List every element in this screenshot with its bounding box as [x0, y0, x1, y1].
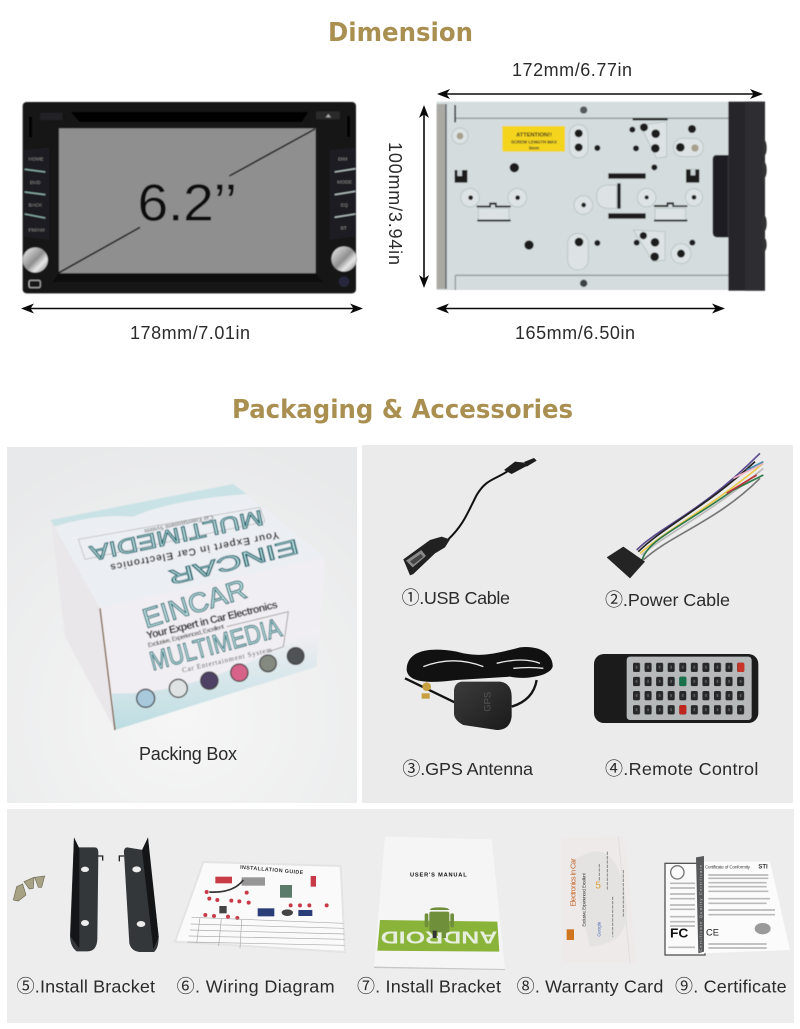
bracket right [119, 837, 159, 952]
screw holes [455, 106, 699, 287]
label 100mm: 100mm/3.94in [385, 142, 405, 265]
right buttons: DIM [338, 157, 347, 163]
mic button [339, 277, 349, 287]
height arrow [419, 105, 429, 288]
attention label [502, 126, 565, 152]
front face text: Exclusive, Experienced, Excellent [147, 623, 225, 649]
certificate: Certificate of Conformity [705, 865, 751, 870]
installation guide: INSTALLATION GUIDE [240, 865, 304, 876]
top face text: MULTIMEDIA [87, 505, 266, 566]
usb label: ①.USB Cable [402, 588, 510, 608]
label 178mm: 178mm/7.01in [130, 323, 250, 343]
warranty label: ⑧. Warranty Card [517, 976, 663, 996]
right buttons: BT [340, 225, 347, 231]
front face text: Your Expert in Car Electronics [145, 599, 279, 642]
gps label: ③.GPS Antenna [402, 759, 533, 779]
feature icons [137, 648, 304, 707]
user manual [374, 837, 505, 970]
power cable [607, 453, 767, 578]
panel: documents and hardware [7, 809, 794, 1023]
bracket left [70, 837, 103, 951]
usb cable [403, 458, 537, 575]
left buttons: FM/AM [29, 227, 45, 233]
warranty card: Google [597, 921, 602, 937]
panel: accessories [362, 445, 793, 803]
certificate: CE [706, 927, 719, 937]
user manual: USER'S MANUAL [410, 872, 467, 878]
gps antenna: GPS [483, 692, 493, 712]
left buttons: HOME [29, 157, 44, 163]
chassis arrow [436, 304, 725, 314]
screws [13, 876, 45, 901]
warranty card: Electronics In Car [568, 858, 577, 907]
panel: packing box [7, 447, 357, 803]
manual label: ⑦. Install Bracket [357, 976, 501, 996]
right buttons: EQ [341, 203, 348, 209]
left knob [23, 247, 48, 273]
label 165mm: 165mm/6.50in [515, 323, 635, 343]
attention label: SCREW LENGTH MAX [511, 140, 557, 145]
box illustration [51, 484, 325, 730]
certificate: Certificate Quality Certificate [698, 864, 703, 952]
screen size 6.2 inches: 6.2’’ [138, 174, 237, 232]
title: Packaging and Accessories: Packaging & Accessories [232, 395, 573, 425]
mounting recesses [452, 122, 703, 270]
head unit front view [23, 102, 357, 293]
top face text [78, 505, 301, 589]
title: Dimension: Dimension [328, 18, 473, 48]
warranty card: 5 [595, 880, 601, 891]
top face text: Your Expert in Car Electronics [109, 529, 280, 572]
bracket label: ⑤.Install Bracket [17, 976, 155, 996]
installation guide [175, 862, 345, 952]
gps antenna [405, 647, 553, 730]
screen [59, 128, 316, 273]
head unit side view [437, 102, 767, 291]
front face text [139, 573, 288, 676]
certificate: FC [670, 925, 689, 940]
left buttons [24, 147, 49, 240]
remote control [594, 654, 758, 723]
certificate [665, 856, 790, 955]
front bezel [713, 102, 767, 291]
power cable label: ②.Power Cable [605, 590, 730, 610]
front face text: MULTIMEDIA [146, 612, 285, 676]
right buttons [329, 147, 355, 240]
right knob [331, 246, 357, 272]
warranty card: Exclusive, Experienced, Excellent [581, 873, 586, 927]
top face text: Car Entertainment System [143, 513, 214, 535]
wiring label: ⑥. Wiring Diagram [177, 976, 335, 996]
left buttons: BACK [29, 203, 43, 209]
certificate label: ⑨. Certificate [675, 976, 787, 996]
top face text: EINCAR [166, 534, 301, 589]
screen diagonal [59, 129, 315, 273]
front face text: EINCAR [139, 573, 250, 634]
usb port [29, 280, 40, 288]
attention label: ATTENTION!! [516, 132, 552, 138]
right buttons: MODE [337, 179, 353, 185]
user manual: ANDROID [381, 928, 497, 948]
front face text: Car Entertainment System [181, 646, 273, 674]
left buttons: DVD [30, 180, 41, 186]
attention label: 5mm [529, 145, 539, 150]
label packing box: Packing Box [139, 744, 237, 764]
width arrow top [437, 89, 763, 99]
certificate: STI [758, 864, 768, 870]
label 172mm: 172mm/6.77in [512, 60, 632, 80]
width arrow front [21, 304, 363, 314]
remote label: ④.Remote Control [605, 759, 758, 779]
warranty card [561, 837, 637, 963]
